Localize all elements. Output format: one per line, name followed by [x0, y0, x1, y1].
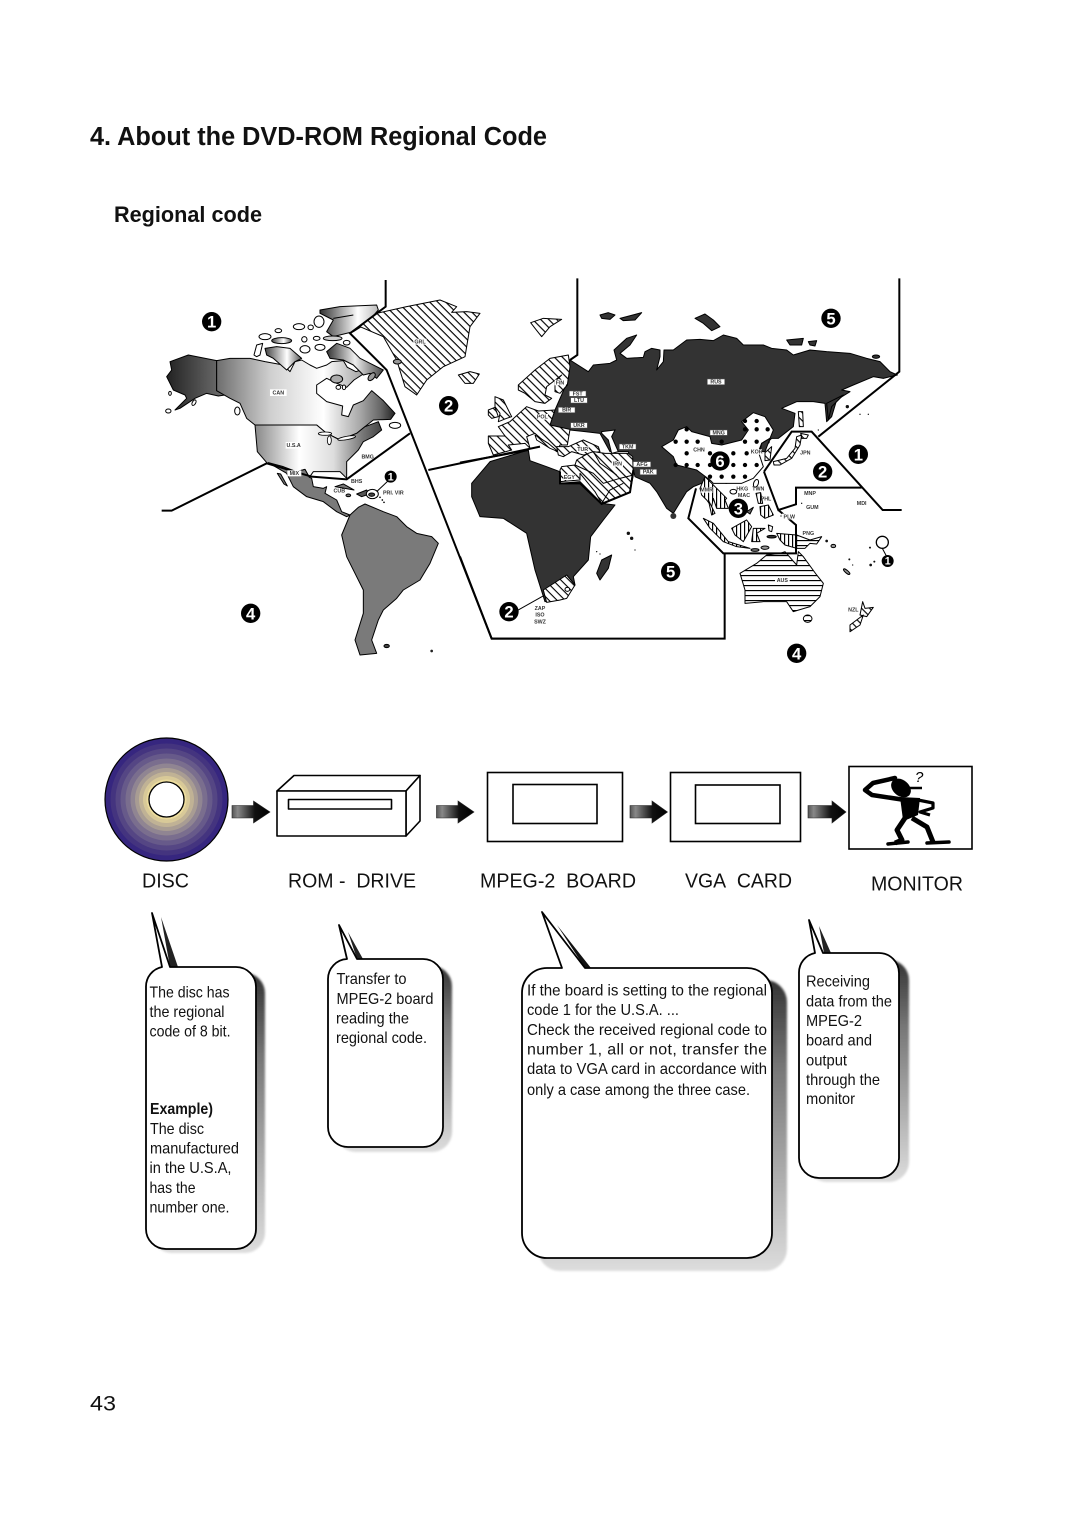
zone number 2, South Africa: 2	[504, 603, 514, 622]
callout: MPEG-2 board: number 1, all or not, transfer the	[527, 1042, 767, 1058]
title: 4. About the DVD-ROM Regional Code	[90, 123, 547, 151]
Guam ring	[876, 536, 888, 548]
arrow: board to VGA card	[630, 801, 668, 823]
Eurasia labels: ISO	[535, 613, 545, 619]
Iceland	[458, 372, 479, 383]
Philippines, Taiwan, Hong Kong, other islands	[730, 479, 776, 551]
Eurasia labels: FST	[573, 391, 583, 397]
Greenland	[360, 300, 480, 395]
zone number 2, Japan: 2	[818, 463, 827, 482]
zone number 5, northeast	[821, 309, 841, 328]
callout: monitor	[799, 920, 909, 1182]
Caribbean islands	[335, 484, 378, 499]
Eurasia labels: MMR	[700, 488, 713, 494]
China, zone 6	[662, 413, 773, 483]
Italy	[535, 435, 558, 452]
Japan	[773, 412, 808, 465]
icon: monitor with puzzled figure: ?	[915, 769, 924, 786]
arrow: disc to drive	[232, 801, 270, 823]
callout: monitor: data from the	[806, 994, 892, 1010]
icon: MPEG-2 board	[488, 772, 622, 842]
zone number 1, Puerto Rico callout	[377, 471, 397, 492]
Australia	[740, 552, 823, 612]
Baja California	[277, 473, 287, 486]
callout: MPEG-2 board: data to VGA card in accordance with	[527, 1061, 767, 1078]
label: ROM drive: ROM - DRIVE	[288, 870, 416, 892]
Americas labels: CAN	[273, 390, 284, 396]
South America	[342, 504, 438, 655]
Eurasia labels: PNG	[803, 531, 814, 537]
Korea	[765, 447, 772, 461]
zone number 4, Oceania: 4	[792, 644, 802, 663]
New Zealand	[850, 602, 873, 632]
label: MPEG-2 board: MPEG-2 BOARD	[480, 870, 636, 892]
zone number 1, North America	[202, 312, 221, 332]
Eurasia labels: FIN	[556, 380, 564, 386]
label: monitor: MONITOR	[871, 872, 963, 896]
zone number 1, Pacific: 1	[854, 445, 863, 464]
icon: ROM drive	[277, 776, 420, 836]
Eurasia labels: POL	[537, 415, 549, 421]
zone number 4, South America: 4	[246, 604, 256, 623]
callout: MPEG-2 board: code 1 for the U.S.A. ...	[527, 1002, 679, 1019]
icon: VGA card	[670, 772, 800, 842]
Europe mainland	[488, 407, 570, 455]
Eurasia labels: TWN	[752, 487, 765, 493]
zone number 1, Guam callout	[882, 555, 894, 568]
callout: disc: The disc has	[150, 984, 230, 1002]
Eurasia labels: LTU	[574, 398, 584, 404]
Eurasia labels: EGY	[564, 475, 575, 481]
zone number 5, Indian Ocean	[661, 562, 680, 582]
Eurasia labels: AUS	[777, 578, 788, 584]
Northern Europe	[518, 355, 570, 403]
Eurasia labels: TUR	[577, 447, 588, 453]
Alaska	[167, 355, 225, 410]
Southeast Asia	[700, 477, 797, 548]
Eurasia labels: TKM	[622, 444, 634, 450]
zone number 1, North America: 1	[207, 313, 216, 332]
callout: monitor: monitor	[806, 1091, 856, 1108]
Madagascar	[597, 555, 612, 580]
Sri Lanka	[670, 513, 676, 519]
Papua New Guinea	[797, 535, 822, 548]
Americas labels: BHS	[351, 479, 363, 485]
USA	[255, 422, 382, 478]
Americas labels: MIX	[290, 471, 300, 477]
Africa	[472, 450, 615, 602]
Eurasia labels: RUS	[710, 380, 722, 386]
page number: 43	[90, 1392, 116, 1416]
Arctic islands	[166, 305, 401, 428]
callout: disc: has the	[150, 1180, 196, 1197]
icon: monitor with puzzled figure	[849, 766, 972, 849]
Indian Ocean dots	[596, 532, 636, 555]
zone number 1, Puerto Rico callout: 1	[388, 471, 394, 483]
callout: disc: code of 8 bit.	[150, 1024, 230, 1040]
zone number 3, Southeast Asia: 3	[734, 499, 743, 518]
callout: disc: in the U.S.A,	[150, 1160, 232, 1177]
zone number 2, Japan	[813, 462, 832, 482]
Eurasia labels: PHL	[761, 497, 772, 503]
arrow: VGA card to monitor	[808, 801, 846, 823]
callout: disc: the regional	[150, 1004, 224, 1021]
callout: disc	[146, 913, 265, 1253]
Eurasia labels: PLW	[784, 514, 796, 520]
Southern Africa	[543, 575, 575, 602]
Eurasia labels	[534, 379, 867, 625]
North Korea	[760, 438, 770, 452]
Arctic Russian islands	[600, 313, 880, 420]
callout: monitor: Receiving	[806, 974, 870, 990]
callout: MPEG-2 board: If the board is setting to the regional	[527, 982, 767, 1000]
callout: MPEG-2 board: Check the received regional code to	[527, 1022, 767, 1039]
Eurasia labels: SWZ	[534, 619, 547, 625]
Americas labels: CUB	[334, 489, 345, 495]
Eurasia labels: JPN	[800, 450, 811, 456]
zone number 5, northeast: 5	[826, 309, 836, 328]
map: Americas and Greenland	[162, 280, 540, 655]
callout: monitor: through the	[806, 1072, 880, 1089]
Americas labels: BMG	[361, 454, 374, 460]
UK and Ireland	[488, 397, 512, 422]
Caspian Sea	[602, 430, 618, 453]
zone number 4, South America	[241, 604, 260, 623]
Eurasia labels: UKR	[573, 423, 585, 429]
Eurasia labels: HKG	[736, 487, 748, 493]
callout: ROM drive: MPEG-2 board	[336, 991, 434, 1008]
Eurasia labels: MDI	[857, 501, 867, 507]
map: Eurasia, Africa and Oceania	[460, 278, 902, 663]
callout: monitor: board and	[806, 1032, 872, 1050]
Americas labels	[270, 339, 427, 496]
callout: monitor: output	[806, 1052, 848, 1070]
Eurasia labels: MNP	[804, 491, 816, 497]
label: VGA card: VGA CARD	[685, 870, 792, 892]
Tasmania	[803, 615, 812, 622]
callout: monitor: MPEG-2	[806, 1013, 862, 1030]
world map: regional code zones	[162, 278, 902, 663]
Eurasia labels: NZL	[848, 608, 859, 614]
callout: ROM drive	[328, 925, 452, 1152]
callout: MPEG-2 board	[522, 912, 787, 1271]
Middle East and Arabia	[560, 452, 633, 503]
Svalbard	[531, 318, 562, 337]
zone number 6, China	[710, 451, 730, 471]
zone number 2, Atlantic	[439, 396, 458, 416]
Eurasia labels: MAC	[738, 493, 750, 499]
zone number 4, Oceania	[787, 644, 806, 663]
Americas labels: PRI. VIR	[383, 490, 404, 496]
callout: ROM drive: reading the	[336, 1010, 409, 1028]
callout: ROM drive: regional code.	[336, 1030, 427, 1047]
zone number 1, Guam callout: 1	[885, 556, 891, 568]
callout: disc: manufactured	[150, 1140, 239, 1158]
Eurasia labels: AFG	[636, 462, 648, 468]
Eurasia labels: IRN	[613, 462, 622, 468]
zone number 6, China: 6	[715, 452, 725, 471]
zone number 3, Southeast Asia	[729, 499, 748, 518]
Eurasia labels: CHN	[693, 448, 705, 454]
Zone boundary lines, Eurasia	[460, 278, 902, 639]
zone number 2, South Africa	[499, 602, 519, 622]
callout: disc: The disc	[150, 1121, 204, 1138]
Turkey and Balkans	[557, 440, 600, 457]
Eurasia labels: PAK	[643, 470, 654, 476]
Eurasia: Russia and Asia	[550, 335, 897, 513]
Pacific islands	[780, 405, 875, 575]
arrow: drive to MPEG-2 board	[436, 801, 474, 823]
Mexico and Central America	[268, 463, 350, 517]
zone number 5, Indian Ocean: 5	[666, 563, 675, 582]
callout: ROM drive: Transfer to	[336, 971, 407, 988]
Great Lakes	[318, 432, 356, 445]
Eurasia labels: MNG	[712, 430, 725, 436]
Eurasia labels: GUM	[806, 505, 819, 511]
label: disc: DISC	[142, 870, 189, 892]
Zone boundary lines, Americas	[350, 280, 540, 639]
callout: disc: number one.	[150, 1200, 230, 1216]
Eurasia labels: KOR	[751, 450, 763, 456]
callout: disc: Example)	[150, 1101, 213, 1118]
subheading: regional code: Regional code	[114, 202, 262, 227]
zone number 1, Pacific	[849, 445, 868, 464]
icon: disc	[105, 738, 228, 861]
Eurasia labels: ZAP	[535, 606, 546, 612]
Americas labels: GRL	[414, 339, 426, 345]
callout: MPEG-2 board: only a case among the three case.	[527, 1082, 750, 1099]
Americas labels: U.S.A	[287, 443, 301, 449]
Canada	[217, 358, 395, 440]
zone number 2, Atlantic: 2	[444, 397, 453, 416]
Eurasia labels: BIR	[562, 408, 571, 414]
